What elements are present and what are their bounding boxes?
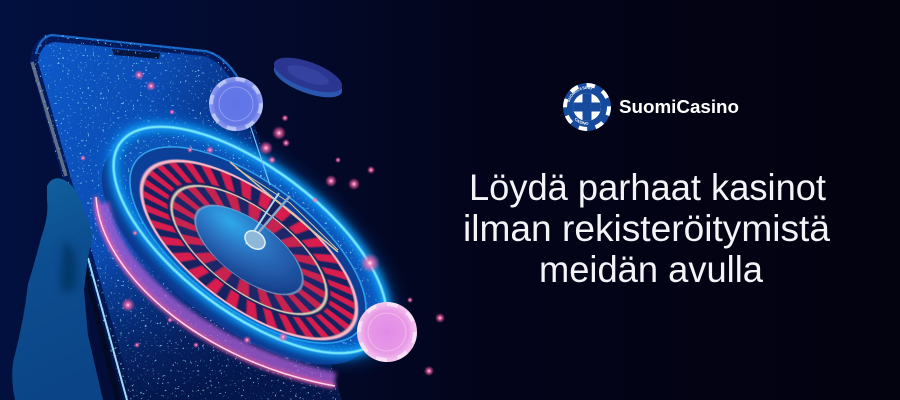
wheel glow bbox=[64, 73, 436, 400]
spindle arms bbox=[230, 162, 338, 252]
headline: meidän avulla bbox=[539, 249, 763, 290]
dark channel bbox=[98, 110, 398, 380]
phone black inner edge bbox=[84, 262, 118, 400]
headline bbox=[463, 167, 830, 290]
chip: pink bbox=[357, 302, 417, 362]
headline: Löydä parhaat kasinot bbox=[469, 167, 827, 208]
headline: ilman rekisteröitymistä bbox=[463, 208, 830, 249]
cyan glow ring bbox=[77, 85, 423, 395]
disc dust bbox=[116, 130, 382, 352]
hand shadow bbox=[60, 240, 77, 292]
phone bbox=[30, 34, 350, 400]
logo chip bbox=[563, 83, 611, 131]
phone blue rim bbox=[36, 35, 238, 78]
thread line bbox=[250, 125, 270, 185]
phone lower edge highlight bbox=[88, 258, 127, 400]
roulette wheel bbox=[90, 110, 406, 392]
chip: flat navy bbox=[270, 50, 346, 105]
logo chip: CASINO bbox=[574, 118, 588, 125]
logo wordmark: SuomiCasino bbox=[619, 97, 739, 117]
wheel cone bbox=[181, 189, 317, 311]
wheel pockets bbox=[113, 128, 385, 372]
phone notch bbox=[112, 49, 160, 59]
wheel side bbox=[67, 103, 405, 400]
star dust on phone bbox=[30, 30, 350, 400]
purple band bbox=[102, 203, 335, 380]
wheel top disc bbox=[77, 85, 423, 395]
logo bbox=[563, 83, 739, 131]
phone silver side edge bbox=[32, 62, 66, 176]
hand bbox=[12, 178, 103, 400]
chip: blue upright bbox=[209, 77, 263, 131]
logo chip: SUOMICASINO bbox=[568, 86, 592, 102]
sparkles bbox=[80, 70, 445, 376]
pink neon arc bbox=[96, 197, 335, 386]
spindle hub bbox=[241, 227, 269, 253]
